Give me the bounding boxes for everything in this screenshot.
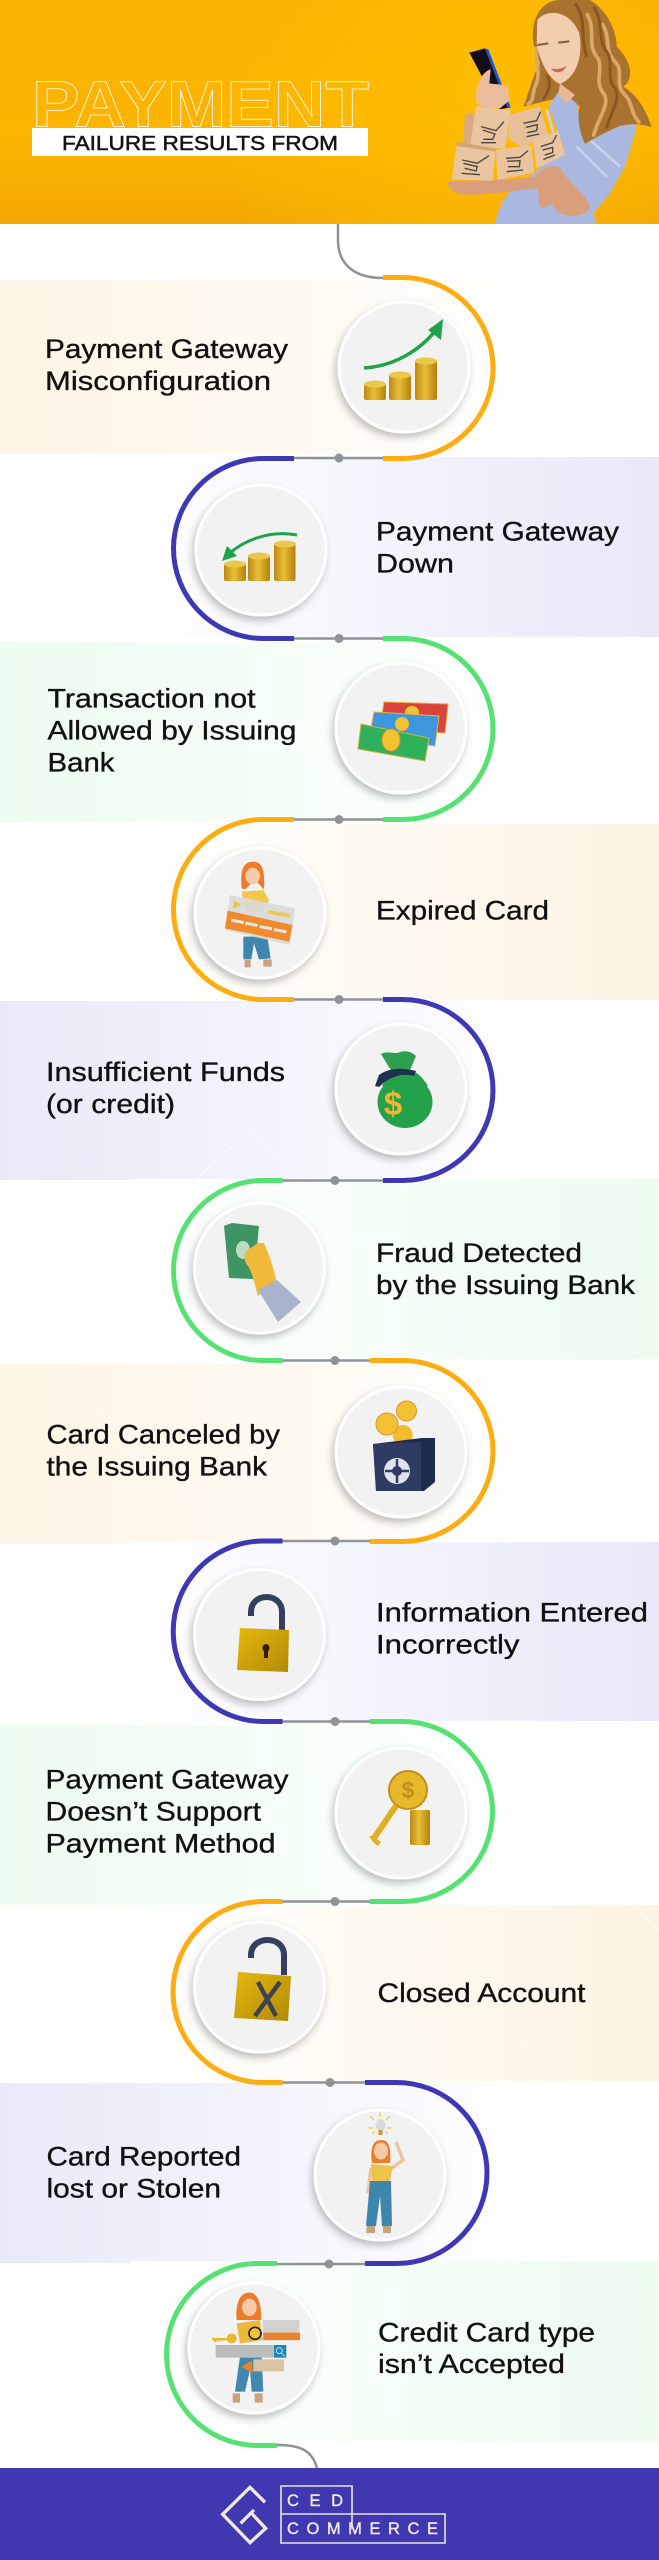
row 1: Payment Gateway Misconfiguration <box>45 278 493 462</box>
label: lost or Stolen <box>46 2174 221 2204</box>
label: Down <box>376 548 454 578</box>
subtitle bar <box>32 128 368 156</box>
arc: blue <box>173 1541 282 1722</box>
arc: orange <box>174 820 294 1000</box>
label: Bank <box>48 748 115 778</box>
band: row 6 <box>130 1179 659 1359</box>
row 3: Transaction not Allowed <box>48 638 493 824</box>
icon: padlock with X <box>234 1940 291 2021</box>
arc: blue <box>365 2082 487 2264</box>
band: row 10 <box>130 1905 659 2081</box>
icon circle <box>194 1203 324 1333</box>
connector: from header <box>338 224 383 278</box>
label <box>46 1057 285 1119</box>
row 4: Expired Card <box>174 820 549 1004</box>
band: row 3 <box>0 642 530 822</box>
row 11: Card Reported lost or Stolen <box>46 2082 487 2268</box>
label <box>376 1598 648 1660</box>
row 2: Payment Gateway Down <box>174 458 620 643</box>
label: Payment Method <box>46 1828 276 1858</box>
arc: green <box>383 638 493 820</box>
label: Card Reported <box>46 2142 241 2172</box>
label: isn’t Accepted <box>378 2349 565 2379</box>
band: row 1 <box>0 280 530 454</box>
band: row 2 <box>130 457 659 637</box>
connector <box>282 1897 370 1906</box>
arc: green <box>167 2264 277 2446</box>
band: row 12 <box>130 2261 659 2441</box>
label: Card Canceled by <box>46 1420 281 1450</box>
connector <box>282 1717 370 1726</box>
illustration: woman holding phone and boxes <box>446 0 652 224</box>
connector <box>294 815 383 824</box>
icon: key and coins: $ <box>402 1777 415 1803</box>
icon circle <box>194 1922 324 2052</box>
icon: hand with cash <box>224 1223 301 1322</box>
band: row 11 <box>0 2083 530 2263</box>
label: Allowed by Issuing <box>48 716 296 746</box>
band: row 7 <box>0 1364 530 1544</box>
arc: orange <box>383 278 493 458</box>
icon circle <box>339 302 469 432</box>
row 9: Payment Gateway Doesn't Support <box>46 1722 492 1906</box>
connector <box>294 454 383 462</box>
band: row 5 <box>0 1001 530 1180</box>
logo wordmark <box>287 2492 438 2538</box>
label: the Issuing Bank <box>46 1452 268 1482</box>
label: Payment Gateway <box>46 1764 289 1794</box>
icon: open padlock <box>237 1597 289 1672</box>
label <box>376 1238 636 1300</box>
logo boxes <box>281 2486 445 2543</box>
label <box>45 334 289 396</box>
arc: green <box>174 1180 282 1360</box>
connector <box>294 995 383 1004</box>
label <box>46 1420 281 1482</box>
label: Insufficient Funds <box>46 1057 285 1087</box>
label <box>46 1764 289 1858</box>
icon circle <box>189 2283 319 2413</box>
label: by the Issuing Bank <box>376 1270 636 1300</box>
connector <box>277 2260 365 2268</box>
label <box>376 516 620 578</box>
subtitle bar: FAILURE RESULTS FROM <box>62 132 338 155</box>
row 5: Insufficient Funds <box>46 1000 493 1185</box>
label: (or credit) <box>46 1089 175 1119</box>
label: Transaction not <box>48 684 256 714</box>
connector <box>282 1356 370 1365</box>
row 7: Card Canceled <box>46 1360 493 1546</box>
label: Payment Gateway <box>376 516 620 546</box>
icon circle <box>336 1024 466 1154</box>
label <box>378 2318 595 2379</box>
row 8: Information Entered Incorrectly <box>173 1541 648 1726</box>
connector <box>282 2078 365 2087</box>
label: Payment Gateway <box>45 334 289 364</box>
icon circle <box>336 1387 466 1517</box>
title: PAYMENT: PAYMENT <box>32 68 369 140</box>
logo wordmark: CED <box>287 2492 343 2510</box>
row 12: Credit Card type isn't Accepted <box>167 2264 595 2468</box>
logo wordmark: COMMERCE <box>287 2520 438 2538</box>
icon: key and coins <box>369 1771 430 1846</box>
band: row 4 <box>130 824 659 1000</box>
label: Misconfiguration <box>45 366 271 396</box>
arc: orange <box>370 1360 493 1542</box>
row 6: Fraud Detected <box>174 1180 636 1365</box>
icon circle <box>336 1748 466 1878</box>
icon: banknotes <box>358 702 448 761</box>
connector: to footer <box>277 2445 317 2468</box>
connector <box>294 634 383 643</box>
icon: woman with idea bulb <box>366 2112 403 2233</box>
logo: CedCommerce <box>223 2486 445 2543</box>
row 10: Closed Account <box>173 1902 586 2087</box>
icon circle <box>194 1570 324 1700</box>
icon: woman with card and search bar <box>212 2293 300 2403</box>
arc: orange <box>173 1902 282 2082</box>
footer background <box>0 2468 659 2560</box>
icon: money bag <box>375 1051 432 1128</box>
connector <box>282 1176 383 1185</box>
label: Credit Card type <box>378 2318 595 2348</box>
label <box>46 2142 241 2204</box>
header background <box>0 0 659 224</box>
icon circle <box>195 848 325 978</box>
band: row 9 <box>0 1725 530 1905</box>
icon: rising coins <box>364 319 443 400</box>
label: Doesn’t Support <box>46 1796 262 1826</box>
header banner <box>0 0 659 224</box>
label: Information Entered <box>376 1598 648 1628</box>
icon: safe with coins <box>373 1401 435 1491</box>
icon circle <box>196 485 326 615</box>
band: row 8 <box>130 1542 659 1721</box>
arc: blue <box>174 458 294 638</box>
connector <box>282 1536 370 1546</box>
arc: blue <box>383 1000 493 1180</box>
label: Fraud Detected <box>376 1238 582 1268</box>
label <box>48 684 296 778</box>
icon circle <box>315 2110 445 2240</box>
arc: green <box>370 1722 492 1902</box>
label: Incorrectly <box>376 1630 520 1660</box>
logo mark <box>223 2487 266 2543</box>
label: Closed Account <box>378 1978 586 2008</box>
label: Expired Card <box>376 896 549 926</box>
icon: money bag: $ <box>384 1085 402 1122</box>
icon circle <box>336 663 466 793</box>
icon: falling coins <box>222 534 297 581</box>
footer <box>0 2468 659 2560</box>
icon: woman with card <box>225 862 295 967</box>
